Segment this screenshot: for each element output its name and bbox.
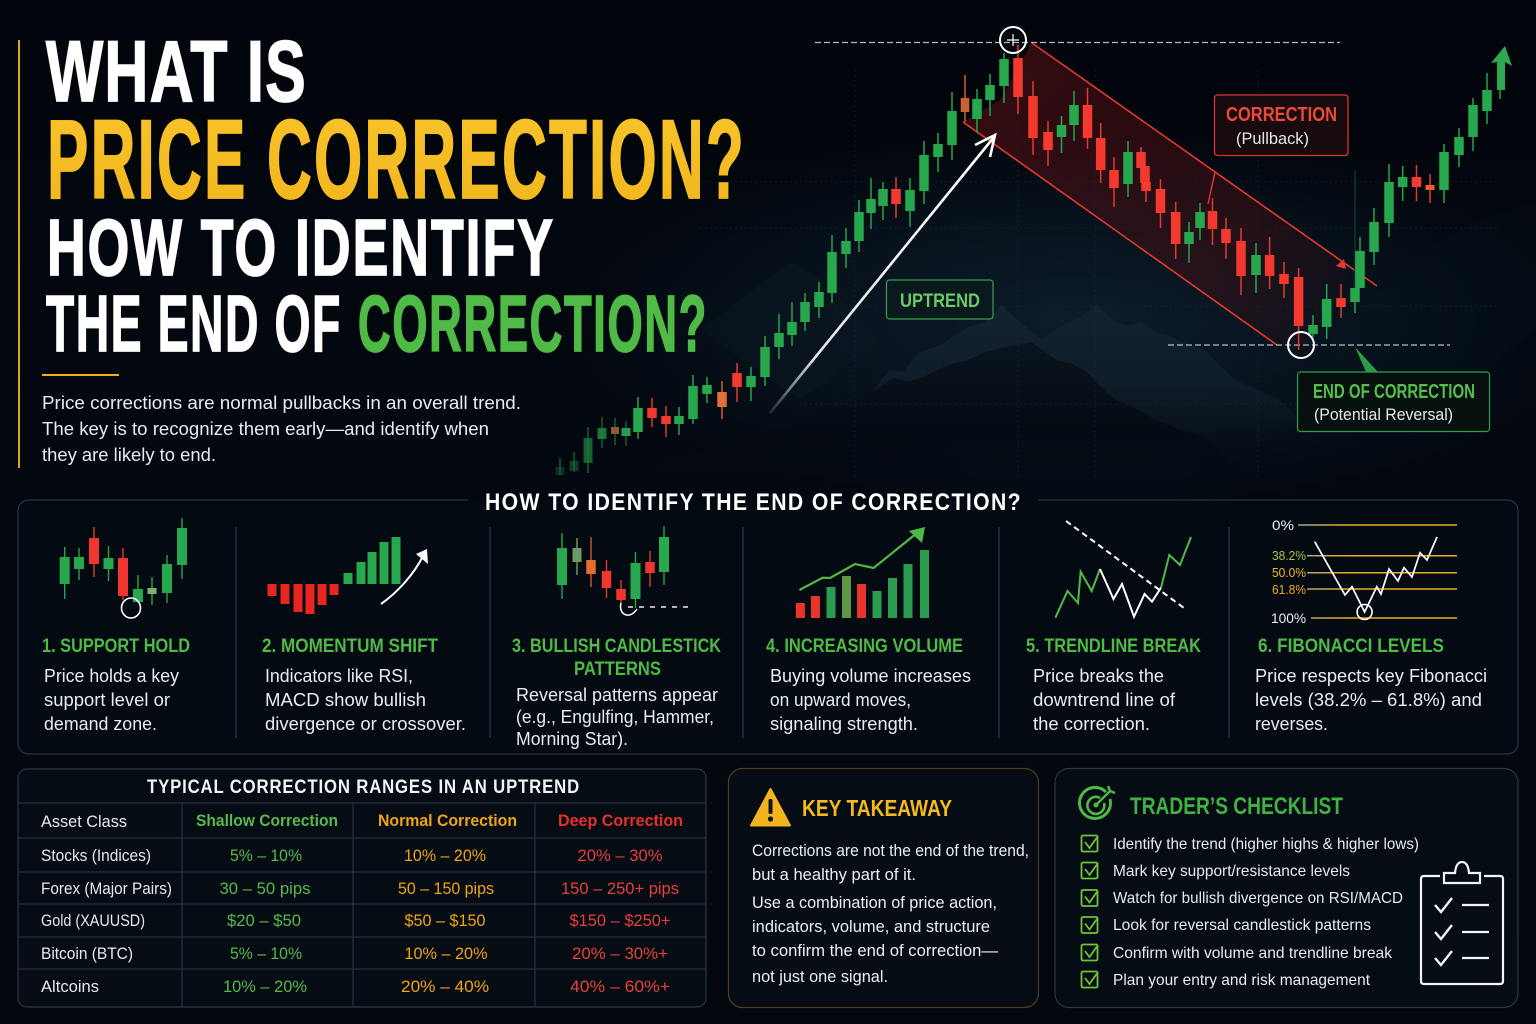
red bodies	[652, 58, 1416, 424]
takeaway heading: KEY TAKEAWAY	[802, 795, 952, 821]
title: WHAT IS	[46, 24, 307, 120]
arrow: uptrend	[770, 135, 995, 413]
title	[46, 24, 746, 368]
icon: clipboard	[1421, 862, 1503, 984]
item 2: momentum shift: MACD show bullish	[265, 690, 426, 710]
label: end of correction: END OF CORRECTION	[1313, 381, 1475, 403]
label: end of correction	[1298, 347, 1490, 432]
title: PRICE CORRECTION?	[47, 97, 746, 222]
label: correction: CORRECTION	[1226, 104, 1337, 126]
checklist heading: TRADER’S CHECKLIST	[1130, 793, 1343, 820]
table rows: 5% – 10%	[230, 846, 302, 865]
item 2: momentum shift: Indicators like RSI,	[265, 666, 413, 686]
icon: fibonacci chart: 38.2%	[1272, 549, 1306, 563]
correction channel	[963, 43, 1377, 348]
table header: Normal Correction	[378, 811, 517, 830]
table rows: 10% – 20%	[223, 977, 307, 996]
intro text: they are likely to end.	[42, 445, 216, 465]
takeaway text: indicators, volume, and structure	[752, 917, 990, 936]
table rows: 10% – 20%	[404, 944, 488, 963]
table rows: Bitcoin (BTC)	[41, 945, 133, 963]
label: correction	[1208, 95, 1348, 204]
icon: fibonacci chart: 100%	[1271, 610, 1306, 626]
item 3: bullish candlestick patterns: (e.g., Engulfing, Hammer,	[516, 707, 714, 727]
item 3: bullish candlestick patterns: Reversal patterns appear	[516, 685, 718, 705]
icon: warning triangle	[751, 789, 790, 826]
checklist text: Look for reversal candlestick patterns	[1113, 917, 1371, 934]
title: CORRECTION?	[358, 279, 708, 368]
icon: bullish pattern candles	[562, 526, 692, 615]
background glow	[560, 130, 1536, 510]
candlestick chart	[560, 45, 1500, 475]
icon: trendline break	[1055, 521, 1191, 618]
chart grid	[700, 70, 1500, 480]
item 1: support hold: support level or	[44, 690, 170, 710]
table header: Asset Class	[41, 813, 127, 831]
checklist text: Watch for bullish divergence on RSI/MACD	[1113, 890, 1403, 907]
panel: correction ranges table	[18, 769, 706, 1007]
item 6: fibonacci levels: levels (38.2% – 61.8%) and	[1255, 690, 1482, 710]
item 3: bullish candlestick patterns: 3. BULLISH CANDLESTICK	[512, 636, 721, 657]
table rows: $150 – $250+	[570, 911, 671, 930]
item 1: support hold: Price holds a key	[44, 666, 179, 686]
table rows: Altcoins	[41, 978, 99, 996]
table title: TYPICAL CORRECTION RANGES IN AN UPTREND	[147, 776, 580, 798]
red wicks	[652, 45, 1430, 437]
table rows: 10% – 20%	[404, 846, 486, 865]
item 5: trendline break: downtrend line of	[1033, 690, 1176, 710]
dim long wick	[1354, 170, 1356, 288]
green bodies	[638, 59, 1487, 432]
table rows: Gold (XAUUSD)	[41, 912, 145, 930]
item 4: increasing volume: Buying volume increases	[770, 666, 971, 686]
intro text: Price corrections are normal pullbacks in an overall trend.	[42, 393, 521, 413]
table header	[41, 811, 683, 831]
checklist text: Confirm with volume and trendline break	[1113, 945, 1393, 962]
checklist text: Mark key support/resistance levels	[1113, 863, 1350, 880]
icon: fibonacci chart: 50.0%	[1272, 566, 1306, 580]
takeaway text: not just one signal.	[752, 967, 888, 986]
table rows: 20% – 30%+	[572, 944, 668, 963]
item 6: fibonacci levels: Price respects key Fibonacci	[1255, 666, 1487, 686]
table rows: 5% – 10%	[230, 944, 302, 963]
icon: volume bars with arrow	[799, 527, 925, 618]
label: uptrend: UPTREND	[900, 291, 980, 312]
marker: top circle	[1000, 27, 1026, 53]
table rows: 150 – 250+ pips	[561, 879, 679, 898]
item 1: support hold: demand zone.	[44, 714, 157, 734]
item 6: fibonacci levels: reverses.	[1255, 714, 1328, 734]
takeaway text: to confirm the end of correction—	[752, 941, 998, 960]
checkboxes	[1082, 836, 1098, 988]
faded early candles	[560, 417, 626, 475]
table rows: 20% – 30%	[578, 846, 662, 865]
takeaway text	[752, 841, 1029, 986]
background mountains	[640, 200, 1536, 470]
icon: target	[1080, 786, 1115, 818]
item 5: trendline break: 5. TRENDLINE BREAK	[1026, 636, 1201, 657]
checklist text: Identify the trend (higher highs & higher lows)	[1113, 836, 1419, 853]
item 3: bullish candlestick patterns: Morning Star).	[516, 729, 628, 749]
table rows: $50 – $150	[404, 911, 486, 930]
checklist text	[1113, 836, 1419, 989]
icon: momentum histogram	[272, 537, 428, 614]
item 5: trendline break: Price breaks the	[1033, 666, 1164, 686]
table rows: 20% – 40%	[401, 977, 489, 996]
item 3: bullish candlestick patterns: PATTERNS	[574, 659, 661, 680]
checklist text: Plan your entry and risk management	[1113, 972, 1371, 989]
item 4: increasing volume: signaling strength.	[770, 714, 918, 734]
intro text: The key is to recognize them early—and identify when	[42, 419, 489, 439]
accent bar: title	[18, 40, 20, 468]
item 1: support hold	[42, 518, 190, 734]
table header: Shallow Correction	[196, 811, 338, 830]
item 4: increasing volume	[766, 527, 971, 734]
item 6: fibonacci levels	[1255, 517, 1487, 734]
item 3: bullish candlestick patterns	[512, 526, 721, 749]
panel heading: HOW TO IDENTIFY THE END OF CORRECTION?	[485, 489, 1022, 516]
takeaway text: Corrections are not the end of the trend,	[752, 841, 1029, 860]
takeaway text: but a healthy part of it.	[752, 865, 916, 884]
icon: fibonacci chart: 0%	[1272, 517, 1294, 533]
accent rule	[42, 374, 119, 376]
table rows: Forex (Major Pairs)	[41, 880, 172, 898]
orange bodies	[722, 75, 965, 419]
item 4: increasing volume: on upward moves,	[770, 690, 911, 710]
panel: key takeaway	[728, 768, 1038, 1008]
item 2: momentum shift: divergence or crossover.	[265, 714, 466, 734]
item 2: momentum shift	[262, 537, 466, 734]
label: uptrend	[886, 280, 993, 319]
dashed levels	[815, 42, 1450, 345]
item 6: fibonacci levels: 6. FIBONACCI LEVELS	[1258, 636, 1444, 657]
table rows: Stocks (Indices)	[41, 847, 151, 865]
table header: Deep Correction	[558, 811, 683, 830]
icon: fibonacci chart	[1271, 517, 1457, 626]
item 5: trendline break: the correction.	[1033, 714, 1150, 734]
table rows: $20 – $50	[227, 911, 301, 930]
icon: fibonacci chart: 61.8%	[1272, 583, 1306, 597]
item 1: support hold: 1. SUPPORT HOLD	[42, 636, 190, 657]
table rows: 30 – 50 pips	[220, 879, 310, 898]
label: end of correction: (Potential Reversal)	[1314, 405, 1453, 424]
takeaway text: Use a combination of price action,	[752, 893, 997, 912]
panel: trader's checklist	[1055, 768, 1518, 1008]
title: HOW TO IDENTIFY	[47, 203, 555, 292]
icon: arrow up after reversal	[1491, 46, 1512, 90]
table rows: 40% – 60%+	[570, 977, 670, 996]
item 4: increasing volume: 4. INCREASING VOLUME	[766, 636, 963, 657]
icon: support candles	[65, 518, 182, 618]
title: THE END OF	[46, 279, 342, 368]
label: correction: (Pullback)	[1236, 129, 1309, 148]
item 2: momentum shift: 2. MOMENTUM SHIFT	[262, 636, 438, 657]
intro text	[42, 393, 521, 465]
marker: bottom circle	[1288, 332, 1314, 358]
table rows: 50 – 150 pips	[398, 879, 494, 898]
item 5: trendline break	[1026, 521, 1201, 734]
table rows	[41, 846, 679, 996]
panel: how to identify	[18, 500, 1518, 754]
green wicks	[638, 53, 1500, 439]
